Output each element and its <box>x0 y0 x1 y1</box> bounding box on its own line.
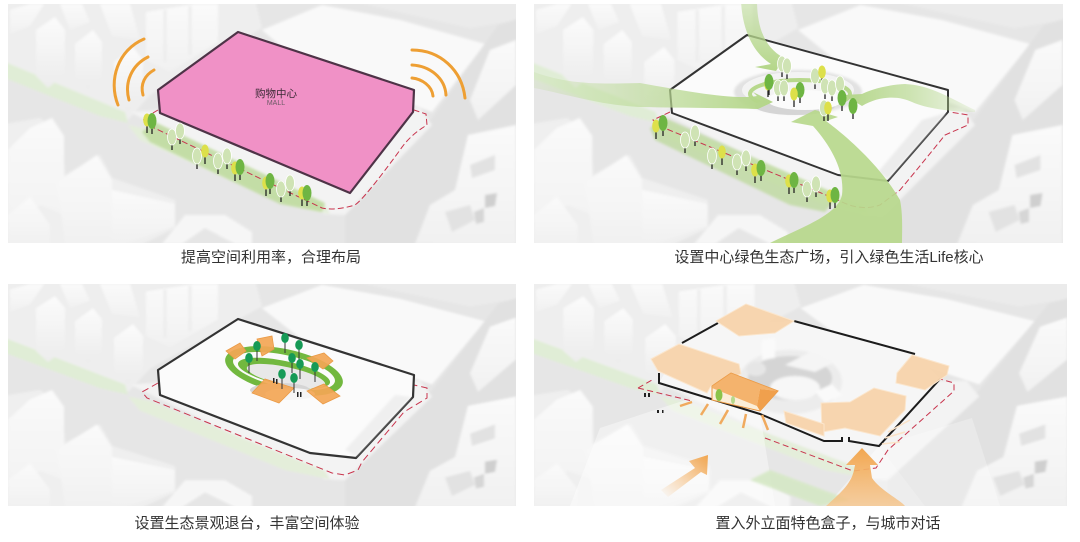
panel: central green plaza <box>526 0 1077 250</box>
courtyard terraces <box>740 351 840 412</box>
side shading <box>345 395 411 456</box>
light cones <box>595 398 925 506</box>
caption 4: 置入外立面特色盒子，与城市对话 <box>715 515 941 532</box>
green planting strip <box>650 118 838 212</box>
panel: facade feature boxes <box>526 280 1080 513</box>
red dashed site boundary <box>142 383 427 475</box>
red dashed site boundary <box>653 112 968 208</box>
arrow: green flow from east <box>844 84 975 112</box>
red dashed site boundary <box>143 110 427 209</box>
trees: street planting <box>652 115 840 209</box>
arrow: green flow from south <box>770 110 902 243</box>
building black outline <box>659 321 940 446</box>
caption 2: 设置中心绿色生态广场，引入绿色生活Life核心 <box>674 249 984 266</box>
arrow: main entrance <box>826 448 905 506</box>
panel: ecological terraces <box>0 280 530 513</box>
featured orange box <box>712 373 778 411</box>
orange radiating rays <box>680 402 768 430</box>
mall label: 购物中心 <box>255 87 297 100</box>
light orange facade boxes <box>651 304 949 436</box>
base map 1 <box>0 0 530 250</box>
arrow: street approach <box>661 455 708 497</box>
caption 3: 设置生态景观退台，丰富空间体验 <box>134 514 360 532</box>
green strip <box>750 470 838 506</box>
trees: street planting <box>143 113 312 206</box>
people silhouettes <box>273 378 302 397</box>
building roof outline <box>670 35 948 181</box>
side shading <box>878 113 946 179</box>
trees: courtyard <box>764 56 858 121</box>
building roof <box>158 319 414 458</box>
icon: left signal waves <box>114 39 154 105</box>
icon: right signal waves <box>412 50 465 98</box>
base map 2 <box>526 0 1077 250</box>
base map 3 <box>0 280 530 513</box>
orange terrace blocks <box>226 336 340 404</box>
arrow: green flow from north <box>741 4 780 71</box>
mall english label: MALL <box>267 100 285 107</box>
pale rays right <box>882 420 910 444</box>
trees: terrace <box>245 333 319 393</box>
panel: space efficiency <box>0 0 530 250</box>
mall pink massing <box>158 32 414 193</box>
terraced court <box>225 346 343 396</box>
caption 1: 提高空间利用率，合理布局 <box>181 249 361 266</box>
base map 4 <box>526 280 1080 513</box>
roof slab floor <box>660 322 906 384</box>
people silhouettes <box>644 393 664 413</box>
green planting strip <box>142 122 325 212</box>
central courtyard <box>734 70 862 115</box>
arrow: green flow from west <box>534 72 773 109</box>
red dashed site boundary <box>638 379 954 471</box>
